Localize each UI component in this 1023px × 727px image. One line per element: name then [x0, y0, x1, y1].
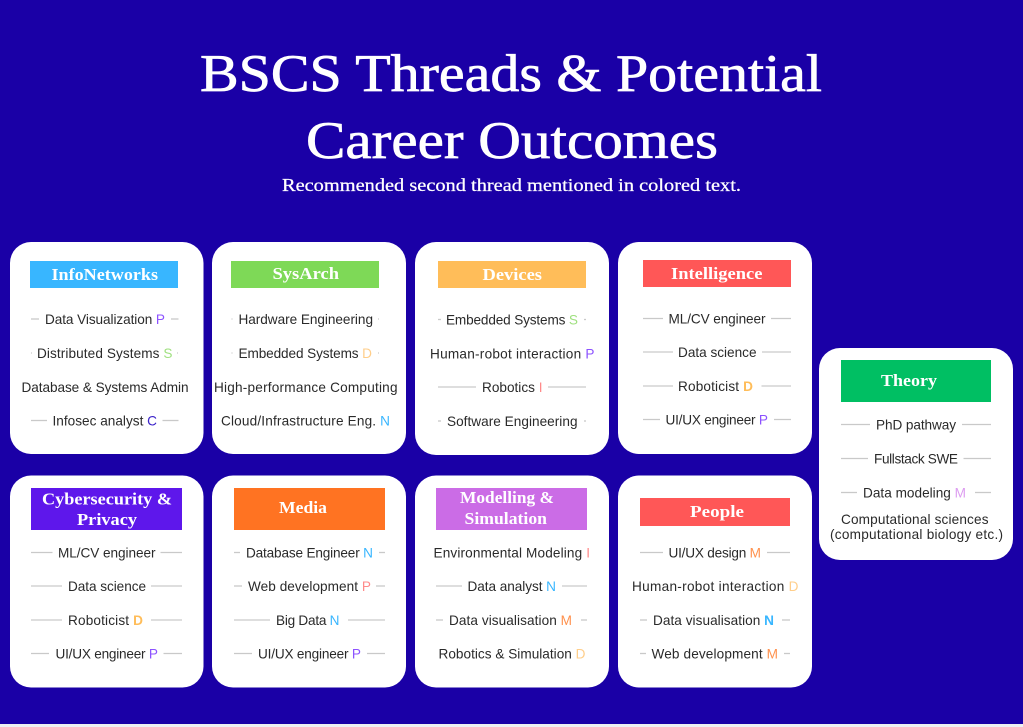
row: High-performance Computing: High-performance Computing [214, 380, 398, 395]
row: Embedded Systems: Embedded Systems S [446, 312, 578, 328]
subtitle: Recommended second thread mentioned in colored text. [282, 175, 741, 195]
row: UI/UX engineer: UI/UX engineer P [56, 646, 158, 662]
panel: InfoNetworks [10, 242, 204, 454]
row: Embedded Systems: Embedded Systems D [238, 346, 372, 361]
row: Data modeling: Data modeling M [863, 486, 966, 500]
row: Environmental Modeling: Environmental Modeling I [434, 546, 590, 560]
row: Database Engineer: Database Engineer N [246, 546, 373, 560]
row: Data analyst: Data analyst N [468, 579, 556, 594]
row: Human-robot interaction: Human-robot interaction P [430, 346, 594, 362]
row: Database & Systems Admin: Database & Systems Admin [22, 380, 188, 395]
heading: People [640, 498, 790, 526]
row: ML/CV engineer: ML/CV engineer [58, 546, 156, 560]
heading: Theory: Theory [881, 371, 938, 390]
heading: Modelling & Simulation [436, 488, 587, 530]
heading: Modelling & Simulation: Simulation [464, 509, 548, 528]
row: Roboticist: Roboticist D [68, 613, 143, 628]
row: Web development: Web development P [248, 579, 371, 594]
row: ML/CV engineer: ML/CV engineer [668, 312, 766, 326]
row: Cloud/Infrastructure Eng.: Cloud/Infrastructure Eng. N [221, 414, 390, 428]
row: Computational sciences [830, 512, 1003, 542]
panel: SysArch [212, 242, 406, 454]
panel: People [618, 476, 812, 688]
row: Fullstack SWE: Fullstack SWE [874, 452, 958, 466]
row: Robotics: Robotics I [482, 380, 542, 395]
row: Web development: Web development M [652, 646, 778, 662]
heading: Cybersecurity & Privacy: Cybersecurity & [42, 490, 172, 508]
heading: Cybersecurity & Privacy: Privacy [77, 510, 138, 529]
row: Distributed Systems: Distributed Systems S [37, 346, 172, 361]
row: Roboticist: Roboticist D [678, 379, 753, 394]
row: Data Visualization: Data Visualization P [45, 312, 165, 327]
row: Data visualisation: Data visualisation M [449, 613, 572, 628]
row: Data visualisation: Data visualisation N [653, 613, 774, 628]
heading: Modelling & Simulation: Modelling & [460, 488, 554, 507]
panel: Media [212, 476, 406, 688]
heading: SysArch [231, 261, 379, 288]
panel: Cybersecurity & Privacy [10, 476, 204, 688]
title [200, 45, 822, 170]
row: Hardware Engineering: Hardware Engineering [238, 312, 373, 327]
row: Infosec analyst: Infosec analyst C [52, 414, 157, 428]
row: UI/UX engineer: UI/UX engineer P [666, 412, 768, 428]
row: Computational sciences: Computational sciences [841, 512, 989, 527]
panel: Modelling & Simulation [415, 476, 609, 688]
row: Data science: Data science [68, 579, 146, 594]
heading: Media: Media [279, 498, 328, 517]
heading: Media [234, 488, 385, 530]
panel: Devices [415, 242, 609, 455]
heading: Devices [438, 261, 586, 288]
row: Data science: Data science [678, 345, 756, 360]
row: Robotics & Simulation: Robotics & Simulation D [438, 646, 586, 662]
row: Human-robot interaction: Human-robot interaction D [632, 579, 799, 594]
panel: Intelligence [618, 242, 812, 454]
heading: People: People [690, 502, 745, 521]
heading: Intelligence [643, 260, 791, 287]
heading: InfoNetworks [30, 261, 178, 288]
heading: Intelligence: Intelligence [671, 264, 763, 283]
row: Software Engineering: Software Engineering [447, 414, 578, 429]
heading: InfoNetworks: InfoNetworks [52, 265, 158, 284]
heading: Devices: Devices [482, 265, 542, 284]
row: UI/UX design: UI/UX design M [668, 546, 761, 560]
row: PhD pathway: PhD pathway [876, 418, 956, 432]
row: Computational sciences: (computational biology etc.) [830, 527, 1003, 542]
title: BSCS Threads & Potential [200, 45, 822, 103]
row: Big Data: Big Data N [276, 613, 340, 628]
row: UI/UX engineer: UI/UX engineer P [258, 646, 361, 662]
title: Career Outcomes [306, 112, 718, 170]
panel: Theory [819, 348, 1013, 560]
heading: SysArch: SysArch [272, 264, 340, 283]
heading: Cybersecurity & Privacy [31, 488, 182, 530]
heading: Theory [841, 360, 991, 402]
